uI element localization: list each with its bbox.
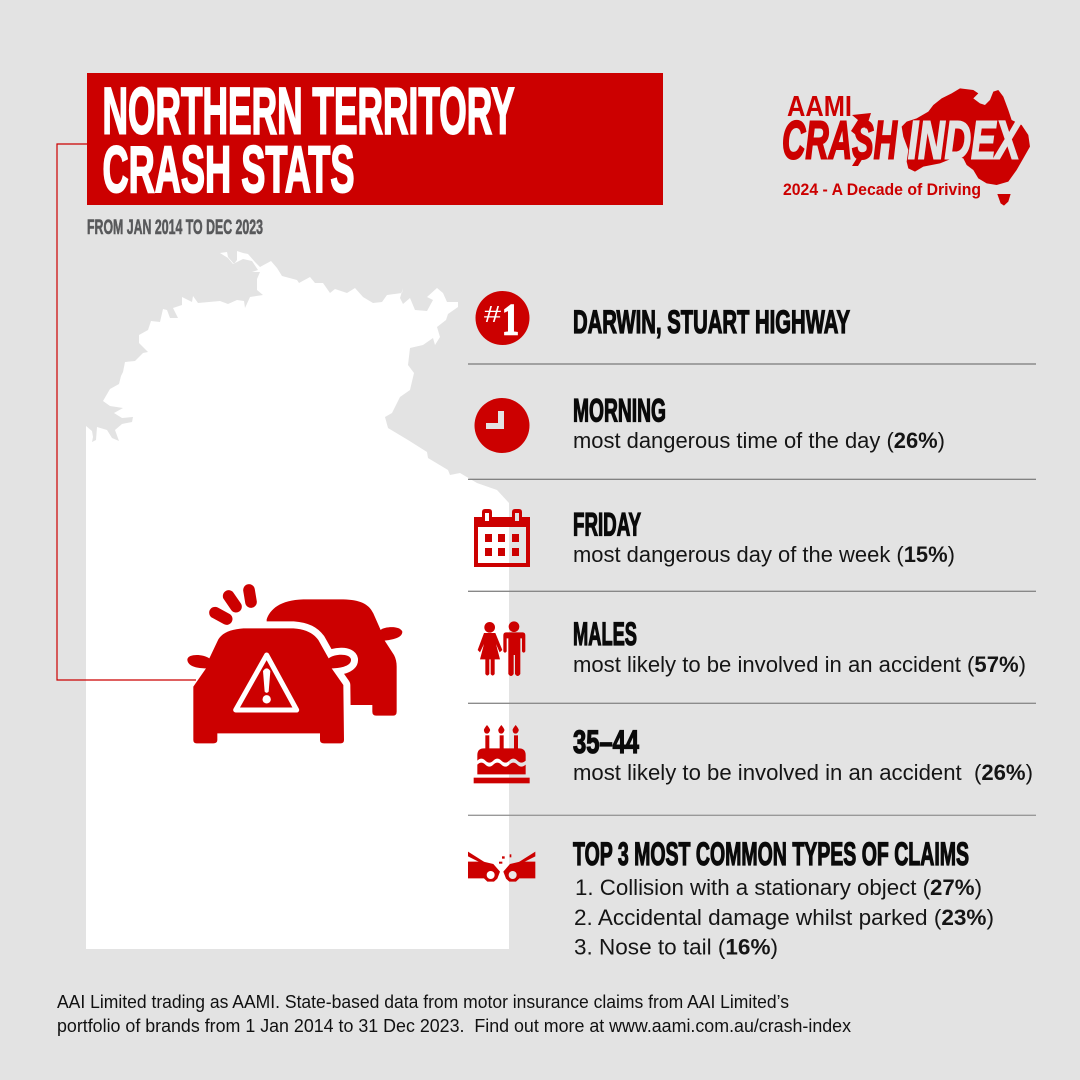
row 1: top location <box>476 291 850 345</box>
row 3: day of week: most dangerous day of the week (15%) <box>573 542 955 567</box>
logo: AAMI Crash Index: AAMI <box>787 91 852 123</box>
subtitle: date range: FROM JAN 2014 TO DEC 2023 <box>87 216 263 239</box>
title block: NORTHERN TERRITORY <box>102 74 514 148</box>
footer note <box>57 992 851 1036</box>
logo: AAMI Crash Index: INDEX <box>908 110 1022 170</box>
icon: crashed cars with warning triangle <box>187 590 402 743</box>
row 1: top location: DARWIN, STUART HIGHWAY <box>573 304 850 340</box>
row 4: gender: most likely to be involved in an accident (57%) <box>573 652 1026 677</box>
row 6: top claims <box>468 836 994 960</box>
icon: birthday cake <box>474 725 530 783</box>
row 4: gender <box>478 616 1026 677</box>
row 5: age group: most likely to be involved in an accident (26%) <box>573 760 1033 785</box>
footer note: portfolio of brands from 1 Jan 2014 to 31 Dec 2023. Find out more at www.aami.com.au/crash-index <box>57 1016 851 1036</box>
row 2: time of day: most dangerous time of the day (26%) <box>573 428 945 453</box>
connector line from title to car <box>57 144 196 680</box>
row 6: top claims: 3. Nose to tail (16%) <box>574 934 778 960</box>
row 5: age group <box>474 724 1033 785</box>
icon: calendar <box>474 509 530 567</box>
icon: clock <box>474 398 530 453</box>
row 6: top claims: 1. Collision with a stationary object (27%) <box>575 875 982 900</box>
logo: AAMI Crash Index <box>782 88 1030 206</box>
title block: CRASH STATS <box>102 132 354 206</box>
row 3: day of week: FRIDAY <box>573 506 641 542</box>
logo: AAMI Crash Index: CRASH <box>782 110 898 170</box>
row 6: top claims: 2. Accidental damage whilst parked (23%) <box>574 905 994 930</box>
row 2: time of day: MORNING <box>573 392 666 428</box>
title block <box>87 73 663 206</box>
icon: head-on collision <box>468 852 535 882</box>
row 4: gender: MALES <box>573 616 637 652</box>
icon: number one badge: # <box>484 301 501 327</box>
icon: number one badge <box>476 291 530 345</box>
icon: couple <box>478 621 525 676</box>
row 2: time of day <box>474 392 945 453</box>
icon: number one badge: 1 <box>502 295 519 344</box>
footer note: AAI Limited trading as AAMI. State-based data from motor insurance claims from AAI Limited’s <box>57 992 789 1012</box>
row 5: age group: 35–44 <box>573 724 639 760</box>
logo: AAMI Crash Index: 2024 - A Decade of Driving <box>783 181 981 199</box>
row 3: day of week <box>474 506 955 567</box>
map: Northern Territory <box>86 251 509 949</box>
